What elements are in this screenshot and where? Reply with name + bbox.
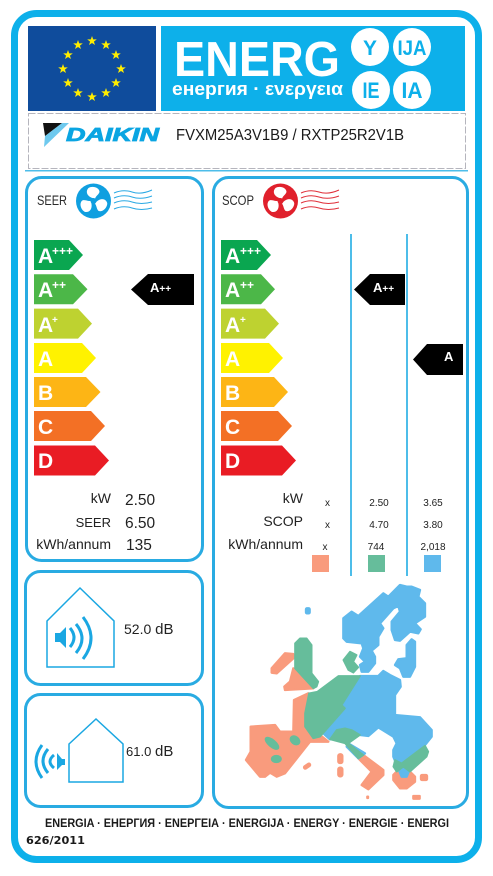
rating marker A <box>413 344 463 375</box>
efficiency scale arrows: C <box>225 416 240 439</box>
efficiency scale arrows: ++ <box>52 278 66 292</box>
efficiency scale arrows: A <box>38 245 53 268</box>
icon: Daikin logo <box>43 123 160 147</box>
energy banner: IJA <box>398 37 426 60</box>
SEER data table: kW <box>91 490 112 506</box>
efficiency scale arrows: C <box>38 416 53 439</box>
SCOP data table: 744 <box>368 542 385 553</box>
SEER data table: SEER <box>76 515 111 530</box>
efficiency scale arrows: D <box>38 450 53 473</box>
icon: Daikin logo: DAIKIN <box>66 125 160 145</box>
energy banner: енергия · ενεργεια <box>172 79 343 99</box>
SCOP data table: 4.70 <box>369 520 389 531</box>
panel: outdoor noise <box>26 694 202 806</box>
SEER data table <box>36 490 156 554</box>
energy banner: Y <box>363 37 377 60</box>
supplier and model box: FVXM25A3V1B9 / RXTP25R2V1B <box>176 127 404 144</box>
rating marker A++: A++ <box>150 280 171 295</box>
SCOP data table: 2.50 <box>369 498 389 509</box>
SCOP data table: 3.80 <box>423 520 443 531</box>
efficiency scale arrows: A <box>225 314 240 337</box>
efficiency scale arrows: +++ <box>52 244 73 258</box>
panel: indoor noise <box>26 572 202 684</box>
SCOP data table: SCOP <box>263 513 303 529</box>
SCOP data table: x <box>325 498 330 509</box>
SCOP data table: kWh/annum <box>228 536 303 552</box>
SCOP data table: x <box>325 520 330 531</box>
climate column dividers <box>350 234 408 576</box>
efficiency scale arrows: A <box>225 279 240 302</box>
energy banner: IA <box>402 78 423 103</box>
indoor noise value: 52.0 dB <box>124 621 174 638</box>
SEER data table: 135 <box>126 537 152 554</box>
energy banner <box>161 26 465 111</box>
map of Europe climate zones <box>246 585 432 799</box>
efficiency scale arrows: B <box>225 382 240 405</box>
supplier and model box <box>28 114 466 168</box>
rating marker A++: A++ <box>373 280 394 295</box>
rating marker A++ <box>354 274 405 305</box>
efficiency scale arrows: B <box>38 382 53 405</box>
climate colour swatches <box>312 555 441 572</box>
efficiency scale arrows: ++ <box>240 278 254 292</box>
panel: SEER <box>26 178 202 560</box>
efficiency scale arrows: A <box>225 245 240 268</box>
icon: heating fan <box>263 184 339 218</box>
efficiency scale arrows <box>221 240 296 476</box>
EU flag <box>28 26 156 111</box>
SEER heading: SEER <box>37 192 67 208</box>
efficiency scale arrows: + <box>240 315 246 326</box>
rating marker A: A <box>444 349 454 364</box>
SCOP data table: x <box>322 542 328 553</box>
efficiency scale arrows: D <box>225 450 240 473</box>
energy banner: ENERG <box>174 33 340 87</box>
SEER data table: 6.50 <box>125 515 156 532</box>
SEER data table: kWh/annum <box>36 536 111 552</box>
efficiency scale arrows <box>34 240 109 476</box>
icon: house with indoor speaker <box>47 588 114 667</box>
efficiency scale arrows: A <box>225 348 240 371</box>
rating marker A++ <box>131 274 194 305</box>
icon: cooling fan <box>76 184 152 218</box>
efficiency scale arrows: A <box>38 279 53 302</box>
efficiency scale arrows: A <box>38 348 53 371</box>
SCOP data table: 2,018 <box>420 542 446 553</box>
outdoor noise value: dB <box>155 743 173 760</box>
SCOP heading: SCOP <box>222 192 254 208</box>
efficiency scale arrows: A <box>38 314 53 337</box>
efficiency scale arrows: +++ <box>240 244 261 258</box>
SCOP data table: 3.65 <box>423 498 443 509</box>
SCOP data table <box>228 490 446 553</box>
panel: SCOP <box>214 178 468 808</box>
energy banner: IE <box>362 78 380 103</box>
SEER data table: 2.50 <box>125 492 156 509</box>
regulation number: 626/2011 <box>26 834 85 847</box>
outdoor noise value: 61.0 <box>126 744 151 759</box>
icon: house with outdoor speaker <box>36 719 123 782</box>
SCOP data table: kW <box>283 490 304 506</box>
footer languages: ENERGIA · ЕНЕРГИЯ · ΕΝΕΡΓΕΙΑ · ENERGIJA · ENERGY · ENERGIE · ENERGI <box>45 816 449 830</box>
efficiency scale arrows: + <box>52 315 58 326</box>
